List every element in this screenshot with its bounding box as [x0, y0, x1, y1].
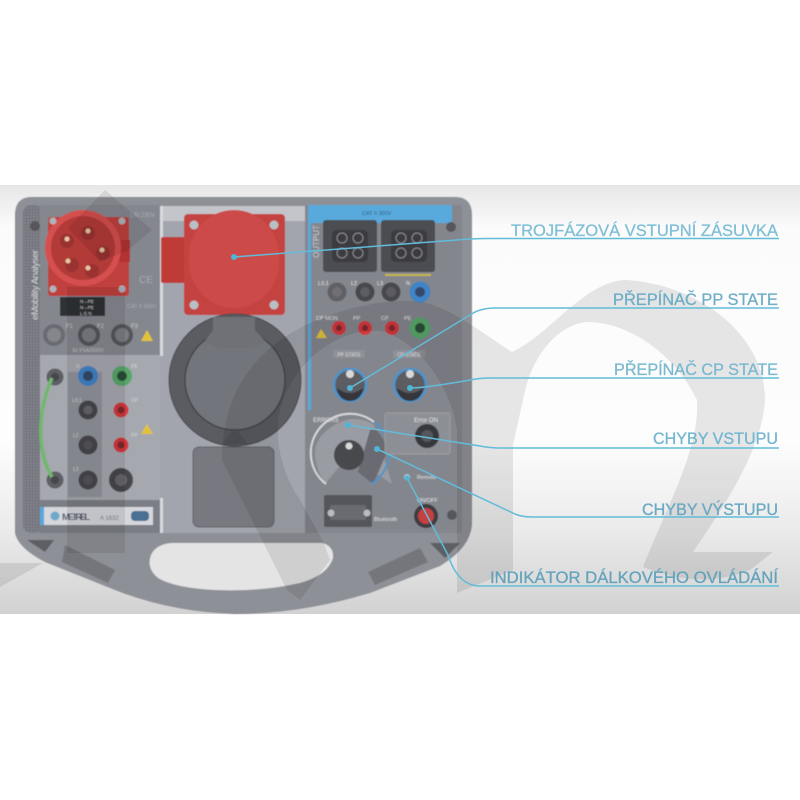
error on button	[385, 413, 450, 454]
callout dots	[231, 254, 413, 480]
PP state knob: PP STATE	[337, 352, 361, 358]
output socket 1	[323, 220, 377, 272]
connector	[324, 495, 372, 527]
output jacks: PE	[404, 316, 412, 322]
output jacks: CP MON	[316, 316, 338, 322]
errors dial: ERRORS	[313, 418, 339, 424]
jacks lower left	[46, 364, 139, 492]
textured side strip	[23, 205, 43, 533]
EV inlet	[169, 314, 301, 446]
on/off button	[414, 498, 438, 528]
output jacks: L2	[351, 281, 357, 287]
fuses: 3x F5A/500V	[72, 348, 104, 354]
PP state knob	[333, 350, 366, 401]
output jacks: CP	[381, 316, 389, 322]
output header: CAT II 300V	[362, 211, 392, 217]
watermark diamond	[68, 190, 152, 262]
lower left jack column	[68, 372, 102, 497]
brand label	[40, 507, 153, 525]
screw	[447, 510, 457, 520]
jacks lower left: PP	[131, 433, 138, 439]
line: input socket	[234, 238, 779, 257]
fuses: F2	[97, 324, 105, 330]
label: PP state: PŘEPÍNAČ PP STATE	[613, 290, 778, 309]
background band	[0, 185, 800, 614]
red input socket	[161, 210, 285, 315]
output jacks: L3	[377, 281, 383, 287]
white edge lower	[160, 498, 163, 533]
right foot recess	[430, 543, 460, 558]
output jacks: PP	[353, 316, 361, 322]
label: remote indicator: INDIKÁTOR DÁLKOVÉHO OVLÁDÁNÍ	[490, 568, 778, 587]
CP state knob	[393, 350, 426, 401]
panel: centre	[160, 206, 305, 533]
on/off button: ON/OFF	[417, 498, 438, 504]
fuses	[43, 324, 139, 354]
watermark vertical band	[67, 287, 125, 553]
icon: warning top left	[141, 330, 153, 341]
wiring label: N→PE	[80, 305, 94, 310]
left foot slot	[62, 545, 115, 583]
fuses: F1	[66, 324, 74, 330]
line: remote indicator	[407, 478, 779, 586]
output socket 2	[381, 220, 435, 272]
side text: eMobility Analyser	[30, 250, 41, 320]
panel: lower left	[40, 355, 160, 500]
label: CP state: PŘEPÍNAČ CP STATE	[614, 360, 778, 379]
label: input socket: TROJFÁZOVÁ VSTUPNÍ ZÁSUVKA	[511, 221, 778, 240]
white edge upper	[160, 206, 163, 356]
line: PP state	[350, 308, 779, 388]
output header	[308, 205, 452, 410]
jacks lower left: CP	[131, 398, 139, 404]
CAT label: CAT II 300V	[127, 304, 157, 310]
inlet cover	[193, 447, 274, 527]
output jacks: L/L1	[318, 281, 329, 287]
handle opening	[150, 543, 333, 590]
watermark bottom-left wedge	[0, 563, 43, 587]
jacks lower left: L/L1	[72, 398, 82, 404]
right foot slot	[368, 548, 428, 585]
output jacks: N	[406, 281, 410, 287]
watermark logo	[0, 190, 773, 600]
wiring label	[60, 297, 105, 316]
line: input errors	[348, 425, 779, 448]
screw top left	[30, 221, 40, 231]
output header: OUTPUT	[312, 225, 321, 258]
jacks lower left: L2	[73, 433, 79, 439]
device case	[15, 197, 472, 614]
errors dial	[311, 414, 392, 484]
jacks lower left: N	[76, 364, 80, 370]
CE mark: CE	[139, 275, 153, 286]
output jacks	[316, 281, 430, 338]
line: CP state	[410, 378, 779, 388]
label: output errors: CHYBY VÝSTUPU	[642, 500, 778, 519]
brand label: METREL	[62, 512, 90, 523]
wiring label: N→PE	[80, 299, 94, 304]
fuses: F3	[131, 324, 139, 330]
screw top right	[446, 222, 456, 232]
wiring label: L G N	[80, 311, 92, 316]
brand label: A 1632	[100, 516, 119, 522]
line: output errors	[377, 449, 779, 517]
icon: warning lower left	[141, 424, 153, 434]
icon: red input plug	[45, 210, 130, 296]
jacks lower left: L3	[73, 467, 79, 473]
rating text: L/N 230V	[130, 213, 155, 219]
bluetooth label: Bluetooth	[374, 517, 397, 523]
watermark arch and omega	[222, 280, 773, 600]
remote indicator	[404, 474, 436, 481]
error on button: Error ON	[414, 418, 438, 424]
panel: top left	[40, 205, 160, 355]
centre top strip	[160, 206, 305, 221]
icon: warning output	[316, 329, 327, 338]
label: input errors: CHYBY VSTUPU	[653, 430, 778, 448]
case body	[15, 197, 472, 614]
CP state knob: CP STATE	[397, 352, 421, 358]
green cable	[41, 378, 52, 477]
left foot recess	[27, 540, 54, 552]
panel: right	[305, 205, 462, 533]
callout lines	[234, 238, 779, 586]
yellow marker	[385, 274, 431, 276]
bottom left dark strip	[40, 500, 160, 533]
remote indicator: Remote	[417, 475, 436, 481]
jacks lower left: PE	[131, 364, 138, 370]
